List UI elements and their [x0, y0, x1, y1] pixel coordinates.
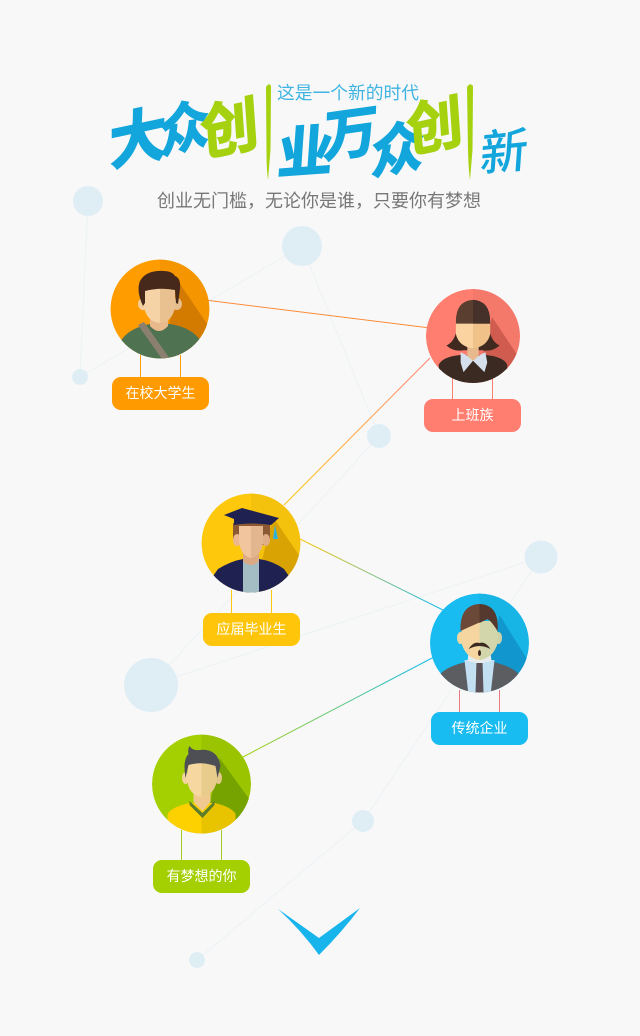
- avatar: [202, 494, 300, 592]
- calligraphy title: 大众创: 众: [157, 92, 212, 167]
- title block: [109, 83, 530, 211]
- calligraphy title: 业万众创: 众: [369, 114, 426, 187]
- infographic canvas: [72, 84, 558, 968]
- persona: office worker: [424, 288, 530, 432]
- calligraphy title: 业万众创: 创: [404, 89, 465, 166]
- subtitle: 创业无门槛，无论你是谁，只要你有梦想: [157, 191, 481, 211]
- persona: new graduate: [202, 493, 311, 646]
- green divider left: [266, 84, 271, 180]
- leader lines: [140, 355, 180, 377]
- calligraphy title: 业万众创: 业: [275, 119, 336, 186]
- label: 有梦想的你: [166, 868, 236, 884]
- label: [112, 377, 209, 410]
- label: 在校大学生: [126, 385, 196, 401]
- green divider right: [467, 84, 473, 180]
- avatar: [426, 289, 520, 383]
- leader lines: [460, 690, 500, 712]
- label: [203, 613, 300, 646]
- avatar: [110, 260, 210, 358]
- leader lines: [182, 830, 222, 860]
- label: [424, 399, 521, 432]
- persona: dreamer: [152, 734, 262, 893]
- leader lines: [452, 378, 492, 399]
- calligraphy title: 业万众创: 万: [322, 99, 380, 170]
- label: [153, 860, 250, 893]
- calligraphy title: 业万众创: [275, 89, 465, 187]
- calligraphy title: 新: 新: [478, 123, 530, 183]
- avatar: [152, 734, 251, 834]
- small tagline: 这是一个新的时代: [277, 83, 419, 103]
- label: 上班族: [452, 407, 494, 423]
- calligraphy title: 大众创: [109, 89, 261, 179]
- connection lines between personas: [205, 300, 445, 757]
- calligraphy title: 大众创: 创: [198, 89, 261, 169]
- label: 传统企业: [452, 720, 508, 736]
- avatar: [430, 594, 529, 692]
- icon: down chevron arrow: [278, 908, 360, 955]
- calligraphy title: 大众创: 大: [109, 98, 167, 179]
- leader lines: [232, 590, 272, 613]
- label: [431, 712, 528, 745]
- persona: college student: [110, 259, 220, 410]
- persona: traditional enterprise: [430, 593, 540, 745]
- background network of nodes: [72, 186, 558, 968]
- label: 应届毕业生: [216, 621, 286, 637]
